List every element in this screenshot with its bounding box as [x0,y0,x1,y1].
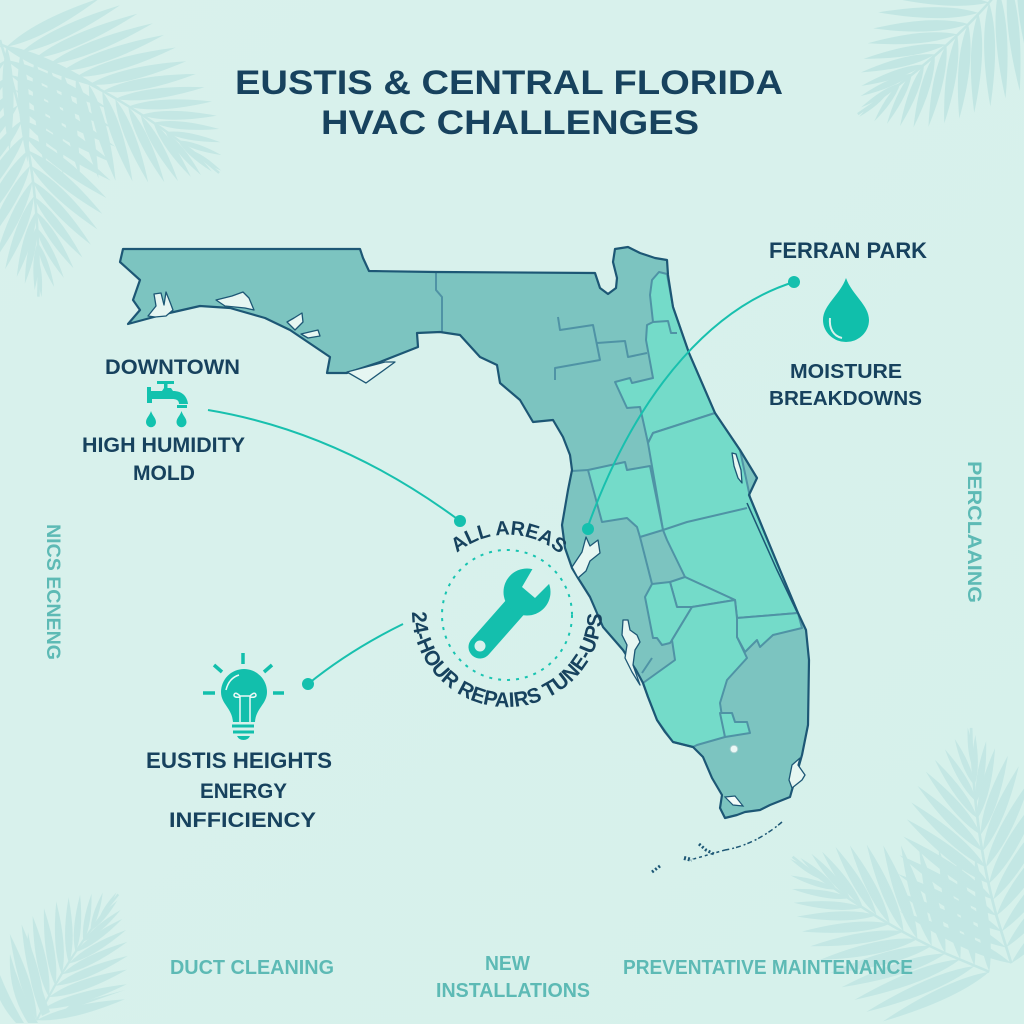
label: Ferran Park: FERRAN PARK [769,238,927,263]
icon: dripping faucet [146,381,188,427]
callout: Downtown [82,356,245,485]
title: EUSTIS & CENTRAL FLORIDA [235,64,783,102]
map location dot [730,745,738,753]
service: new installations: INSTALLATIONS [436,980,590,1002]
palm fronds: bottom right [741,708,1024,1024]
text: high humidity mold: HIGH HUMIDITY [82,434,245,457]
dashed circle [442,550,572,680]
badge: all areas wrench [412,521,602,708]
coastal bays and inlets [148,292,805,788]
icon: light bulb [203,653,284,740]
text: moisture breakdowns: MOISTURE [790,361,902,383]
service regions (lighter counties) [588,272,802,747]
barrier island lagoon [747,503,797,612]
service: new installations: NEW [485,953,530,975]
text: high humidity mold [82,434,245,485]
footer services [170,953,913,1002]
curved label: services: 24-HOUR REPAIRS TUNE-UPS [412,612,602,708]
callout: Eustis Heights [146,653,332,832]
label: Eustis Heights: EUSTIS HEIGHTS [146,748,332,773]
palm fronds: top left [0,0,270,312]
connector: Eustis Heights [302,624,403,690]
service: preventative maintenance: PREVENTATIVE MAINTENANCE [623,957,913,979]
palm frond: top right [794,0,1024,186]
service: duct cleaning: DUCT CLEANING [170,957,334,979]
connector: Downtown [208,410,466,527]
title [235,64,783,142]
callout: Ferran Park [769,238,927,410]
text: energy inefficiency: INFFICIENCY [169,809,316,832]
curved label: all areas: ALL AREAS [454,521,566,552]
icon: wrench [474,563,552,652]
text: energy inefficiency: ENERGY [200,780,287,803]
vertical side text: left: NICS ECNENG [42,524,63,660]
text: moisture breakdowns [769,361,922,410]
map base: state fill [120,247,809,818]
vertical side text: right: PERCLAAING [963,461,984,603]
state outline [120,247,809,818]
text: energy inefficiency [169,780,316,832]
text: high humidity mold: MOLD [133,462,195,485]
text: moisture breakdowns: BREAKDOWNS [769,388,922,410]
icon: water drop [823,278,869,342]
connector: Ferran Park [582,276,800,535]
Florida Bay [725,796,743,806]
title: HVAC CHALLENGES [321,104,699,142]
Florida Keys [652,822,782,872]
map of Florida [120,247,809,872]
label: Downtown: DOWNTOWN [105,356,240,379]
service: new installations [436,953,590,1002]
county boundary lines [436,272,747,673]
palm frond: bottom left [0,855,172,1024]
